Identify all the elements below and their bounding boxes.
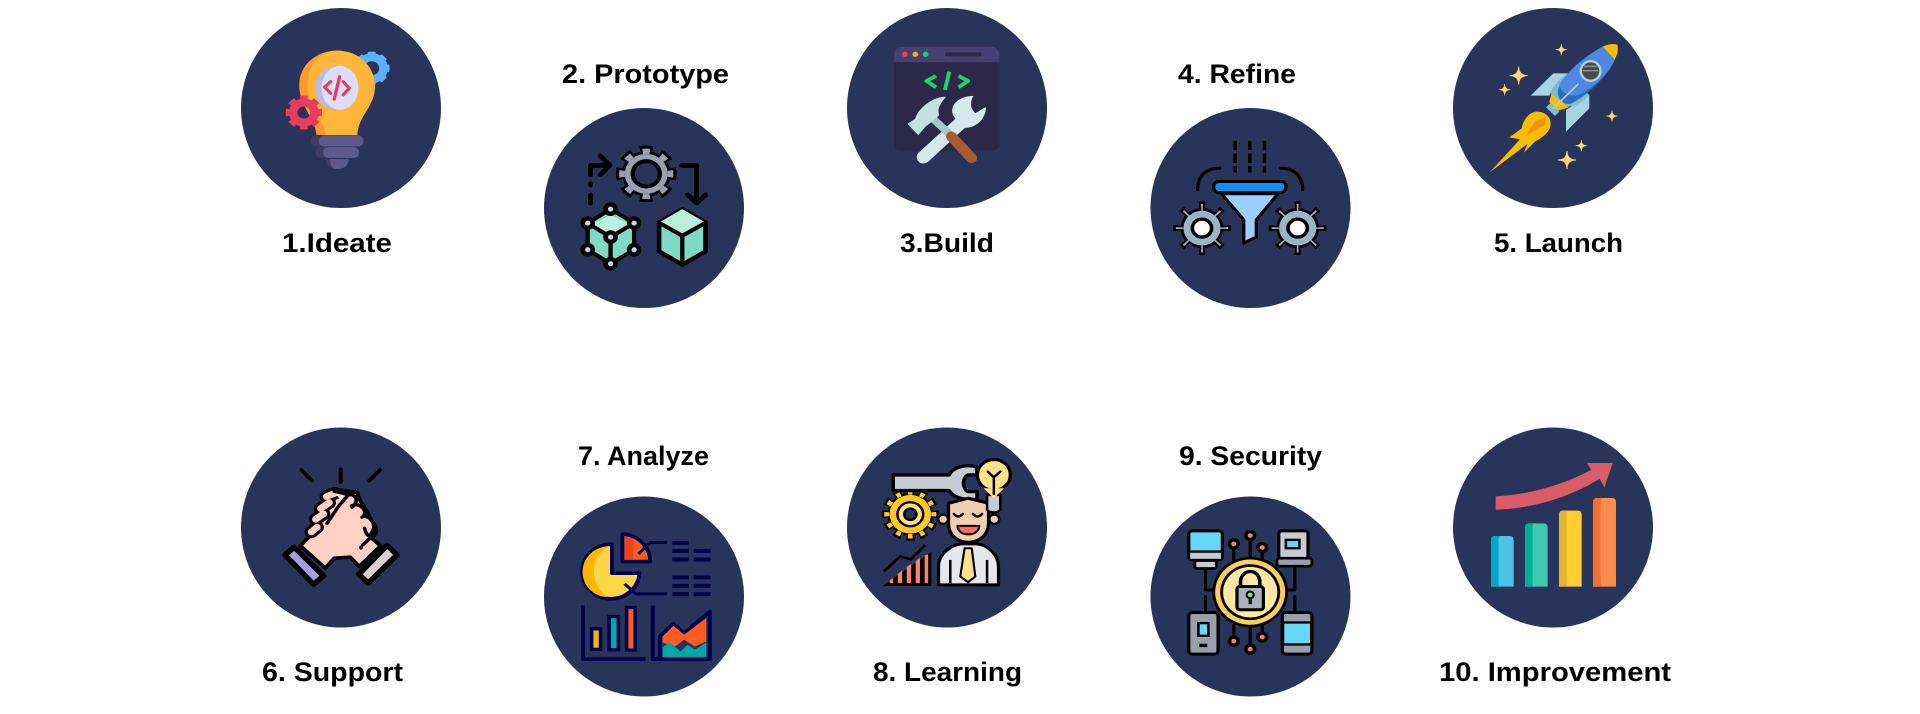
label: 3.Build: 3.Build [900, 228, 994, 258]
step 8: Learning [847, 428, 1047, 687]
circle: learning background [847, 428, 1047, 628]
icon: man with wrench, gear, bulb and chart [883, 460, 1010, 586]
circle: improvement background [1453, 428, 1653, 628]
label: 10. Improvement: 10. Improvement [1439, 657, 1671, 687]
circle: support background [241, 428, 441, 628]
circle: build background [847, 8, 1047, 208]
step 6: Support [241, 428, 441, 687]
step 7: Analyze [544, 441, 744, 696]
label: 5. Launch: 5. Launch [1494, 228, 1623, 258]
circle: analyze background [544, 496, 744, 696]
icon: padlock network [1189, 531, 1312, 654]
step 4: Refine [1150, 59, 1350, 308]
icon: charts dashboard [582, 534, 711, 659]
circle: launch background [1453, 8, 1653, 208]
label: 9. Security: 9. Security [1179, 441, 1322, 471]
label: 4. Refine: 4. Refine [1178, 59, 1296, 89]
step 1: Ideate [241, 8, 441, 258]
step 2: Prototype [544, 59, 744, 308]
icon: funnel with gears [1178, 141, 1322, 251]
circle: refine background [1150, 108, 1350, 308]
icon: code window with hammer and wrench [894, 47, 1000, 158]
circle: prototype background [544, 108, 744, 308]
icon: rocket and stars [1490, 44, 1618, 172]
icon: gear and cubes cycle [583, 150, 706, 268]
label: 8. Learning: 8. Learning [873, 657, 1022, 687]
label: 1.Ideate: 1.Ideate [282, 228, 392, 258]
label: 6. Support: 6. Support [262, 657, 403, 687]
icon: clasped hands [285, 469, 397, 585]
step 5: Launch [1453, 8, 1653, 258]
circle: ideate background [241, 8, 441, 208]
step 9: Security [1150, 441, 1350, 696]
icon: light bulb with gears [288, 51, 387, 169]
circle: security background [1150, 496, 1350, 696]
step 10: Improvement [1439, 428, 1671, 687]
icon: growth bars with rising arrow [1491, 463, 1616, 587]
label: 2. Prototype: 2. Prototype [562, 59, 729, 89]
label: 7. Analyze: 7. Analyze [578, 441, 709, 471]
step 3: Build [847, 8, 1047, 258]
